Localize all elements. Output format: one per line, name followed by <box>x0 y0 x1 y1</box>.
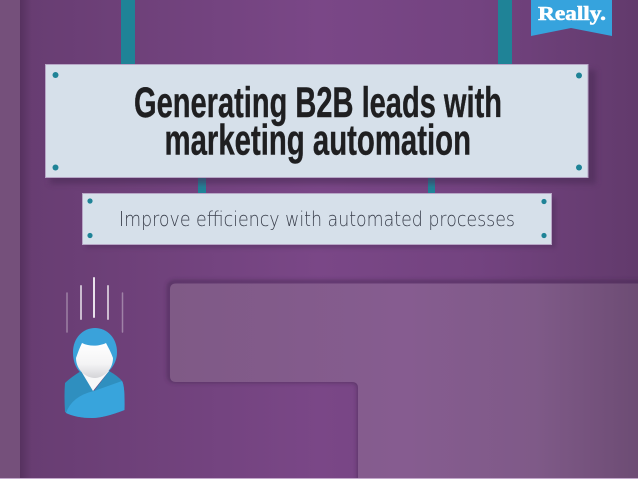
sign rivets <box>52 72 582 170</box>
title text <box>134 79 502 164</box>
bottom edge highlight <box>0 478 638 479</box>
sign rivets <box>87 198 547 238</box>
sign post: lower left <box>198 176 206 196</box>
subtitle text: Improve efficiency with automated processes <box>119 207 515 231</box>
face <box>76 343 113 378</box>
hair <box>73 328 117 372</box>
collar <box>81 366 109 391</box>
icon: falling lines <box>67 278 122 332</box>
icon: person <box>64 328 125 418</box>
title text: marketing automation <box>164 116 471 164</box>
empty panel: stepped card <box>169 282 638 479</box>
subtitle sign <box>82 194 556 248</box>
body <box>64 371 125 418</box>
sign post: upper right <box>498 0 512 66</box>
sign post: upper left <box>121 0 135 66</box>
left side strip <box>0 0 32 479</box>
logo text: Really. <box>538 3 606 25</box>
title sign <box>46 64 596 184</box>
logo ribbon <box>531 0 612 36</box>
sign post: lower right <box>428 176 435 196</box>
